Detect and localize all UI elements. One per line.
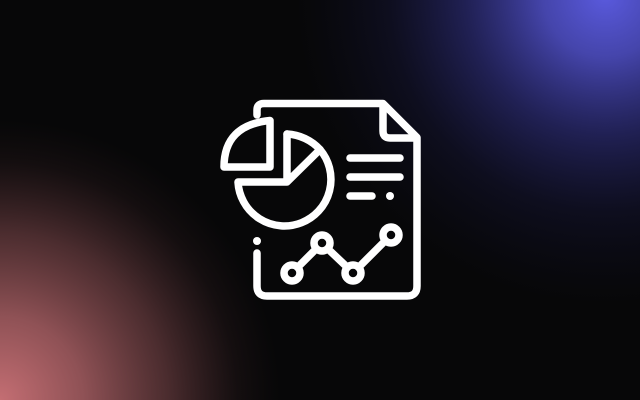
line chart: [284, 227, 399, 281]
text lines: [350, 158, 400, 200]
icon: large pie chart: [238, 134, 331, 226]
icon: quarter pie slice: [224, 120, 270, 167]
icon: report document with charts: [224, 104, 417, 296]
document outline: [253, 104, 417, 296]
